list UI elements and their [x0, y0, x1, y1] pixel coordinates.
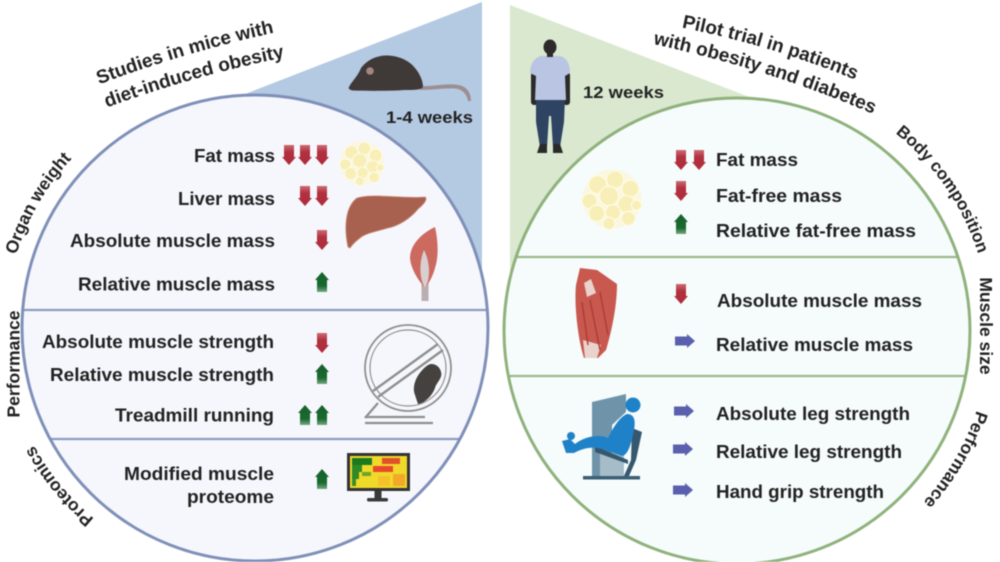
title: mouse studies: Studies in mice with — [96, 20, 274, 84]
group: mouse study row labels: Fat mass — [194, 145, 275, 166]
group: mouse study row labels: Absolute muscle strength — [42, 331, 274, 352]
group: mouse study row labels — [42, 145, 275, 507]
icon: fat cells, patients — [582, 169, 642, 230]
title: patient trial: Pilot trial in patients — [682, 14, 858, 80]
group: patient trial row labels: Relative fat-free mass — [716, 220, 916, 241]
group: mouse study row labels: Relative muscle mass — [78, 274, 275, 294]
icon: person — [530, 40, 570, 153]
group: patient trial row labels: Absolute muscle mass — [717, 290, 922, 311]
title: mouse studies second line: diet-induced obesity — [104, 47, 284, 108]
group: patient trial row labels: Fat-free mass — [716, 185, 842, 206]
section label: performance, patients: Performance — [924, 410, 988, 508]
group: mouse study row labels: Relative muscle strength — [50, 364, 274, 385]
group: patient trial row labels: Absolute leg strength — [716, 403, 910, 424]
text: 12 weeks: 12 weeks — [583, 83, 664, 102]
group: mouse study row labels: Treadmill running — [115, 404, 274, 426]
panel: patient trial circle — [500, 98, 975, 562]
icon: liver — [346, 196, 426, 248]
group: mouse study row labels: Absolute muscle mass — [70, 230, 275, 251]
icon: mouse — [349, 55, 471, 101]
text: 1-4 weeks: 1-4 weeks — [386, 108, 473, 127]
panel: mouse study wedge — [240, 2, 482, 300]
title: patient trial second line: with obesity and diabetes — [654, 34, 876, 114]
icon: heatmap monitor — [347, 453, 410, 502]
group: mouse study row labels: proteome — [187, 486, 274, 507]
section label: proteomics: Proteomics — [26, 446, 94, 528]
group: patient trial row labels — [716, 149, 922, 502]
group: patient trial arrows — [673, 150, 706, 497]
icon: thigh muscle — [575, 268, 617, 358]
icon: leg press machine — [562, 394, 642, 480]
group: mouse study row labels: Modified muscle — [124, 463, 274, 484]
icon: running wheel — [365, 325, 451, 423]
group: patient trial row labels: Relative muscle mass — [716, 334, 913, 355]
section label: muscle size: Muscle size — [976, 277, 996, 375]
group: patient trial row labels: Relative leg strength — [716, 441, 902, 462]
icon: muscle, mice — [410, 227, 438, 301]
section label: body composition: Body composition — [896, 124, 986, 254]
section label: performance, mice: Performance — [4, 310, 24, 418]
panel: patient trial wedge — [510, 5, 752, 290]
group: patient trial row labels: Fat mass — [716, 149, 798, 170]
group: mouse study row labels: Liver mass — [178, 188, 275, 209]
section label: organ weight: Organ weight — [6, 152, 72, 254]
panel: mouse studies circle — [20, 95, 490, 561]
group: mouse study arrows — [282, 145, 329, 489]
group: patient trial row labels: Hand grip strength — [716, 481, 884, 502]
icon: fat cells, mice — [340, 141, 384, 186]
